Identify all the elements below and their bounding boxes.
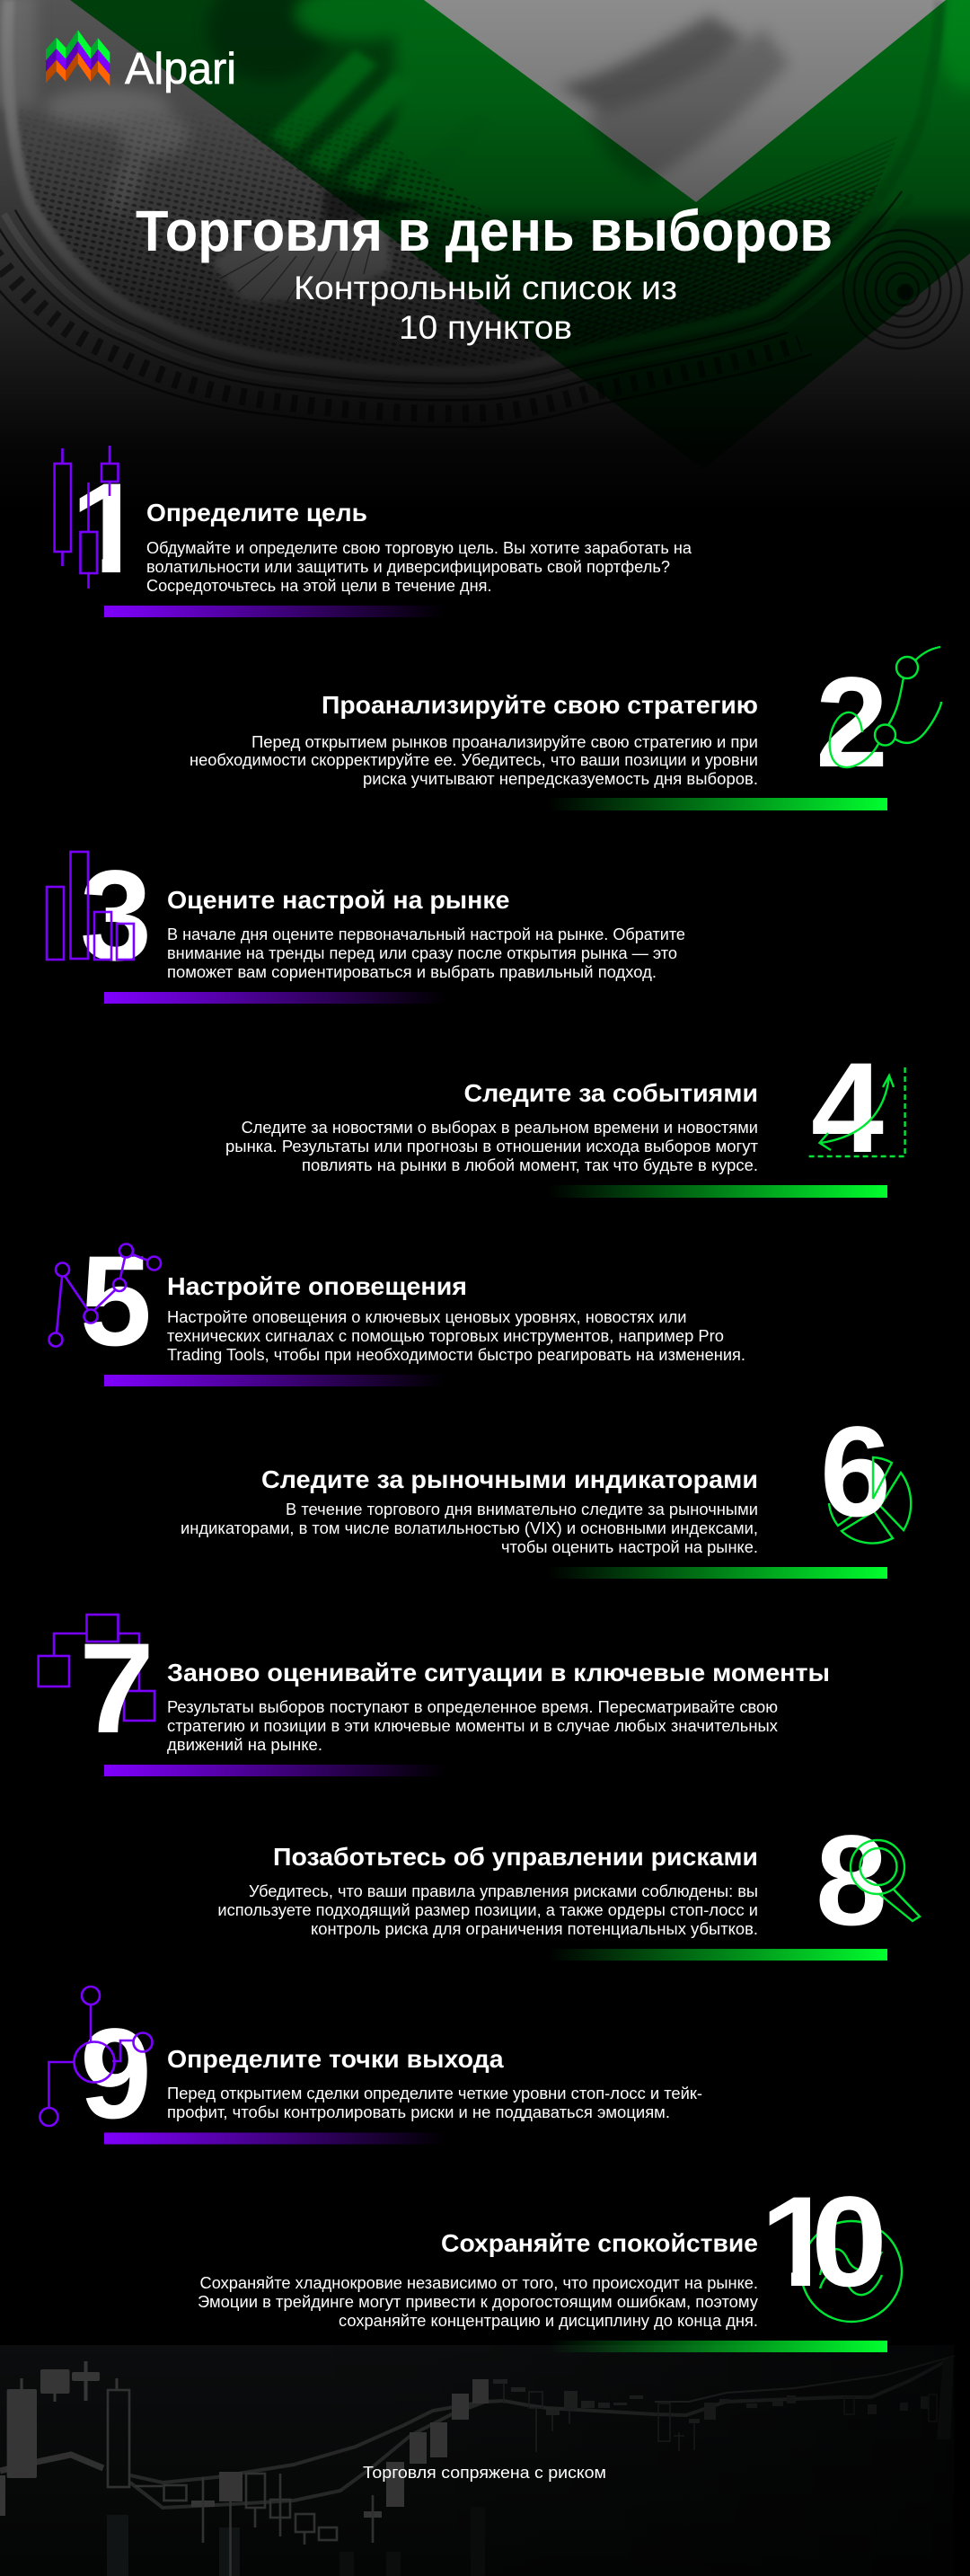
green chevron <box>70 0 970 469</box>
divider bar <box>104 606 445 617</box>
step 3 <box>47 845 685 1004</box>
heading: Определите цель <box>146 499 367 527</box>
body text: Обдумайте и определите свою торговую цель. Вы хотите заработать на <box>146 539 692 557</box>
icon: circuit nodes <box>40 1987 153 2126</box>
body text: волатильности или защитить и диверсифицировать свой портфель? <box>146 558 670 576</box>
body text <box>198 2274 758 2330</box>
body text: используете подходящий размер позиции, а также ордеры стоп-лосс и <box>217 1901 758 1919</box>
body text <box>181 1500 758 1556</box>
body text: Эмоции в трейдинге могут привести к дорогостоящим ошибкам, поэтому <box>198 2293 758 2311</box>
body text: поможет вам сориентироваться и выбрать правильный подход. <box>167 963 657 981</box>
step 6 <box>181 1401 911 1579</box>
body text: Trading Tools, чтобы при необходимости быстро реагировать на изменения. <box>167 1346 745 1364</box>
icon: curve with nodes <box>830 647 941 767</box>
number 1: 1 <box>70 457 148 600</box>
divider bar <box>104 1375 445 1386</box>
divider bar <box>548 798 887 810</box>
number 3: 3 <box>80 845 152 987</box>
body text <box>217 1882 758 1938</box>
number 10: 1 <box>760 2171 838 2314</box>
body text: стратегию и позиции в эти ключевые моменты и в случае любых значительных <box>167 1717 778 1735</box>
risk disclaimer: Торговля сопряжена с риском <box>363 2464 606 2482</box>
number 9: 9 <box>80 2003 152 2146</box>
step 1 <box>55 446 692 617</box>
leaf highlights <box>211 225 391 302</box>
number 2: 2 <box>816 651 888 794</box>
step 7 <box>39 1615 830 1776</box>
heading: Сохраняйте спокойствие <box>441 2229 758 2257</box>
heading: Заново оценивайте ситуации в ключевые моменты <box>167 1659 830 1686</box>
body text <box>167 1698 778 1754</box>
icon: magnifier <box>851 1840 920 1921</box>
number 6: 6 <box>820 1401 891 1544</box>
light eagle wing <box>0 0 970 220</box>
body text: В начале дня оцените первоначальный настрой на рынке. Обратите <box>167 925 685 943</box>
divider bar <box>548 2341 887 2352</box>
heading: Позаботьтесь об управлении рисками <box>273 1843 758 1871</box>
step 4 <box>225 1037 905 1198</box>
subtitle: Контрольный список из <box>294 270 677 306</box>
body text: технических сигналах с помощью торговых инструментов, например Pro <box>167 1327 724 1345</box>
body text: чтобы оценить настрой на рынке. <box>501 1538 758 1556</box>
body text: Перед открытием сделки определите четкие уровни стоп-лосс и тейк- <box>167 2085 702 2102</box>
body text <box>167 1308 745 1364</box>
body text: Сосредоточьтесь на этой цели в течение дня. <box>146 577 492 595</box>
icon: pie wedges behind number <box>829 1473 911 1544</box>
body text <box>225 1119 758 1174</box>
heading: Проанализируйте свою стратегию <box>322 691 758 719</box>
heading: Следите за рыночными индикаторами <box>261 1465 758 1493</box>
body text: движений на рынке. <box>167 1736 322 1754</box>
body text: профит, чтобы контролировать риски и не поддаваться эмоциям. <box>167 2103 670 2121</box>
icon: circle with waves <box>801 2221 902 2322</box>
icon: bars <box>47 852 134 960</box>
body text: индикаторами, в том числе волатильностью (VIX) и основными индексами, <box>181 1519 758 1537</box>
icon: candlesticks <box>55 446 119 589</box>
body text: Результаты выборов поступают в определенное время. Пересматривайте свою <box>167 1698 778 1716</box>
icon: connected nodes <box>48 1244 161 1346</box>
divider bar <box>548 1567 887 1579</box>
number 8: 8 <box>816 1810 887 1952</box>
divider bar <box>104 2133 445 2144</box>
step 2 <box>190 647 941 810</box>
icon: linked boxes <box>39 1615 154 1721</box>
body text: повлиять на рынки в любой момент, так что будьте в курсе. <box>302 1156 758 1174</box>
hero background: banknote photo with green chevron <box>0 0 970 435</box>
subtitle <box>294 270 677 346</box>
heading: Оцените настрой на рынке <box>167 886 510 914</box>
body text: внимание на тренды перед или сразу после открытия рынка — это <box>167 944 677 962</box>
divider bar <box>548 1949 887 1961</box>
number 10 <box>769 2196 882 2288</box>
heading: Настройте оповещения <box>167 1272 467 1300</box>
icon: dashed axes and arrow <box>807 1067 905 1156</box>
body text: Сохраняйте хладнокровие независимо от того, что происходит на рынке. <box>199 2274 758 2292</box>
footer chart background <box>0 2345 970 2576</box>
body text: контроль риска для ограничения потенциальных убытков. <box>311 1920 758 1938</box>
step 10 <box>198 2196 904 2352</box>
body text <box>167 925 685 981</box>
body text: Настройте оповещения о ключевых ценовых уровнях, новостях или <box>167 1308 686 1326</box>
seal ring <box>7 0 939 372</box>
number 7: 7 <box>79 1617 154 1760</box>
body text: В течение торгового дня внимательно следите за рыночными <box>286 1500 758 1518</box>
subtitle: 10 пунктов <box>399 309 572 346</box>
heading: Определите точки выхода <box>167 2045 504 2073</box>
divider bar <box>104 992 445 1004</box>
body text: сохраняйте концентрацию и дисциплину до конца дня. <box>339 2312 758 2330</box>
body text: Следите за новостями о выборах в реальном времени и новостями <box>242 1119 758 1137</box>
body text: необходимости скорректируйте ее. Убедитесь, что ваши позиции и уровни <box>190 751 758 769</box>
logo wordmark: Alpari <box>125 44 236 93</box>
dotted engraving inside the seal ring <box>22 126 897 365</box>
step 8 <box>217 1810 920 1961</box>
body text: риска учитывают непредсказуемость дня выборов. <box>363 770 758 788</box>
heading: Следите за событиями <box>463 1079 758 1107</box>
body text: Убедитесь, что ваши правила управления рисками соблюдены: вы <box>249 1882 758 1900</box>
title: Торговля в день выборов <box>136 199 833 263</box>
body text <box>190 733 758 788</box>
spiral ornament <box>843 230 962 349</box>
body text: рынка. Результаты или прогнозы в отношении исхода выборов могут <box>225 1138 758 1155</box>
divider bar <box>104 1765 445 1776</box>
feather stripes under the green <box>269 49 435 224</box>
logo <box>46 30 236 93</box>
step 5 <box>48 1230 745 1386</box>
number 4: 4 <box>811 1037 884 1180</box>
body text <box>167 2085 702 2121</box>
number 5: 5 <box>80 1230 152 1373</box>
divider bar <box>548 1185 887 1198</box>
icon: top wedge <box>873 1457 892 1499</box>
body text: Перед открытием рынков проанализируйте свою стратегию и при <box>251 733 758 751</box>
step 9 <box>40 1987 702 2146</box>
logo mark <box>46 30 110 86</box>
number 10: 0 <box>811 2171 887 2314</box>
body text <box>146 539 692 595</box>
